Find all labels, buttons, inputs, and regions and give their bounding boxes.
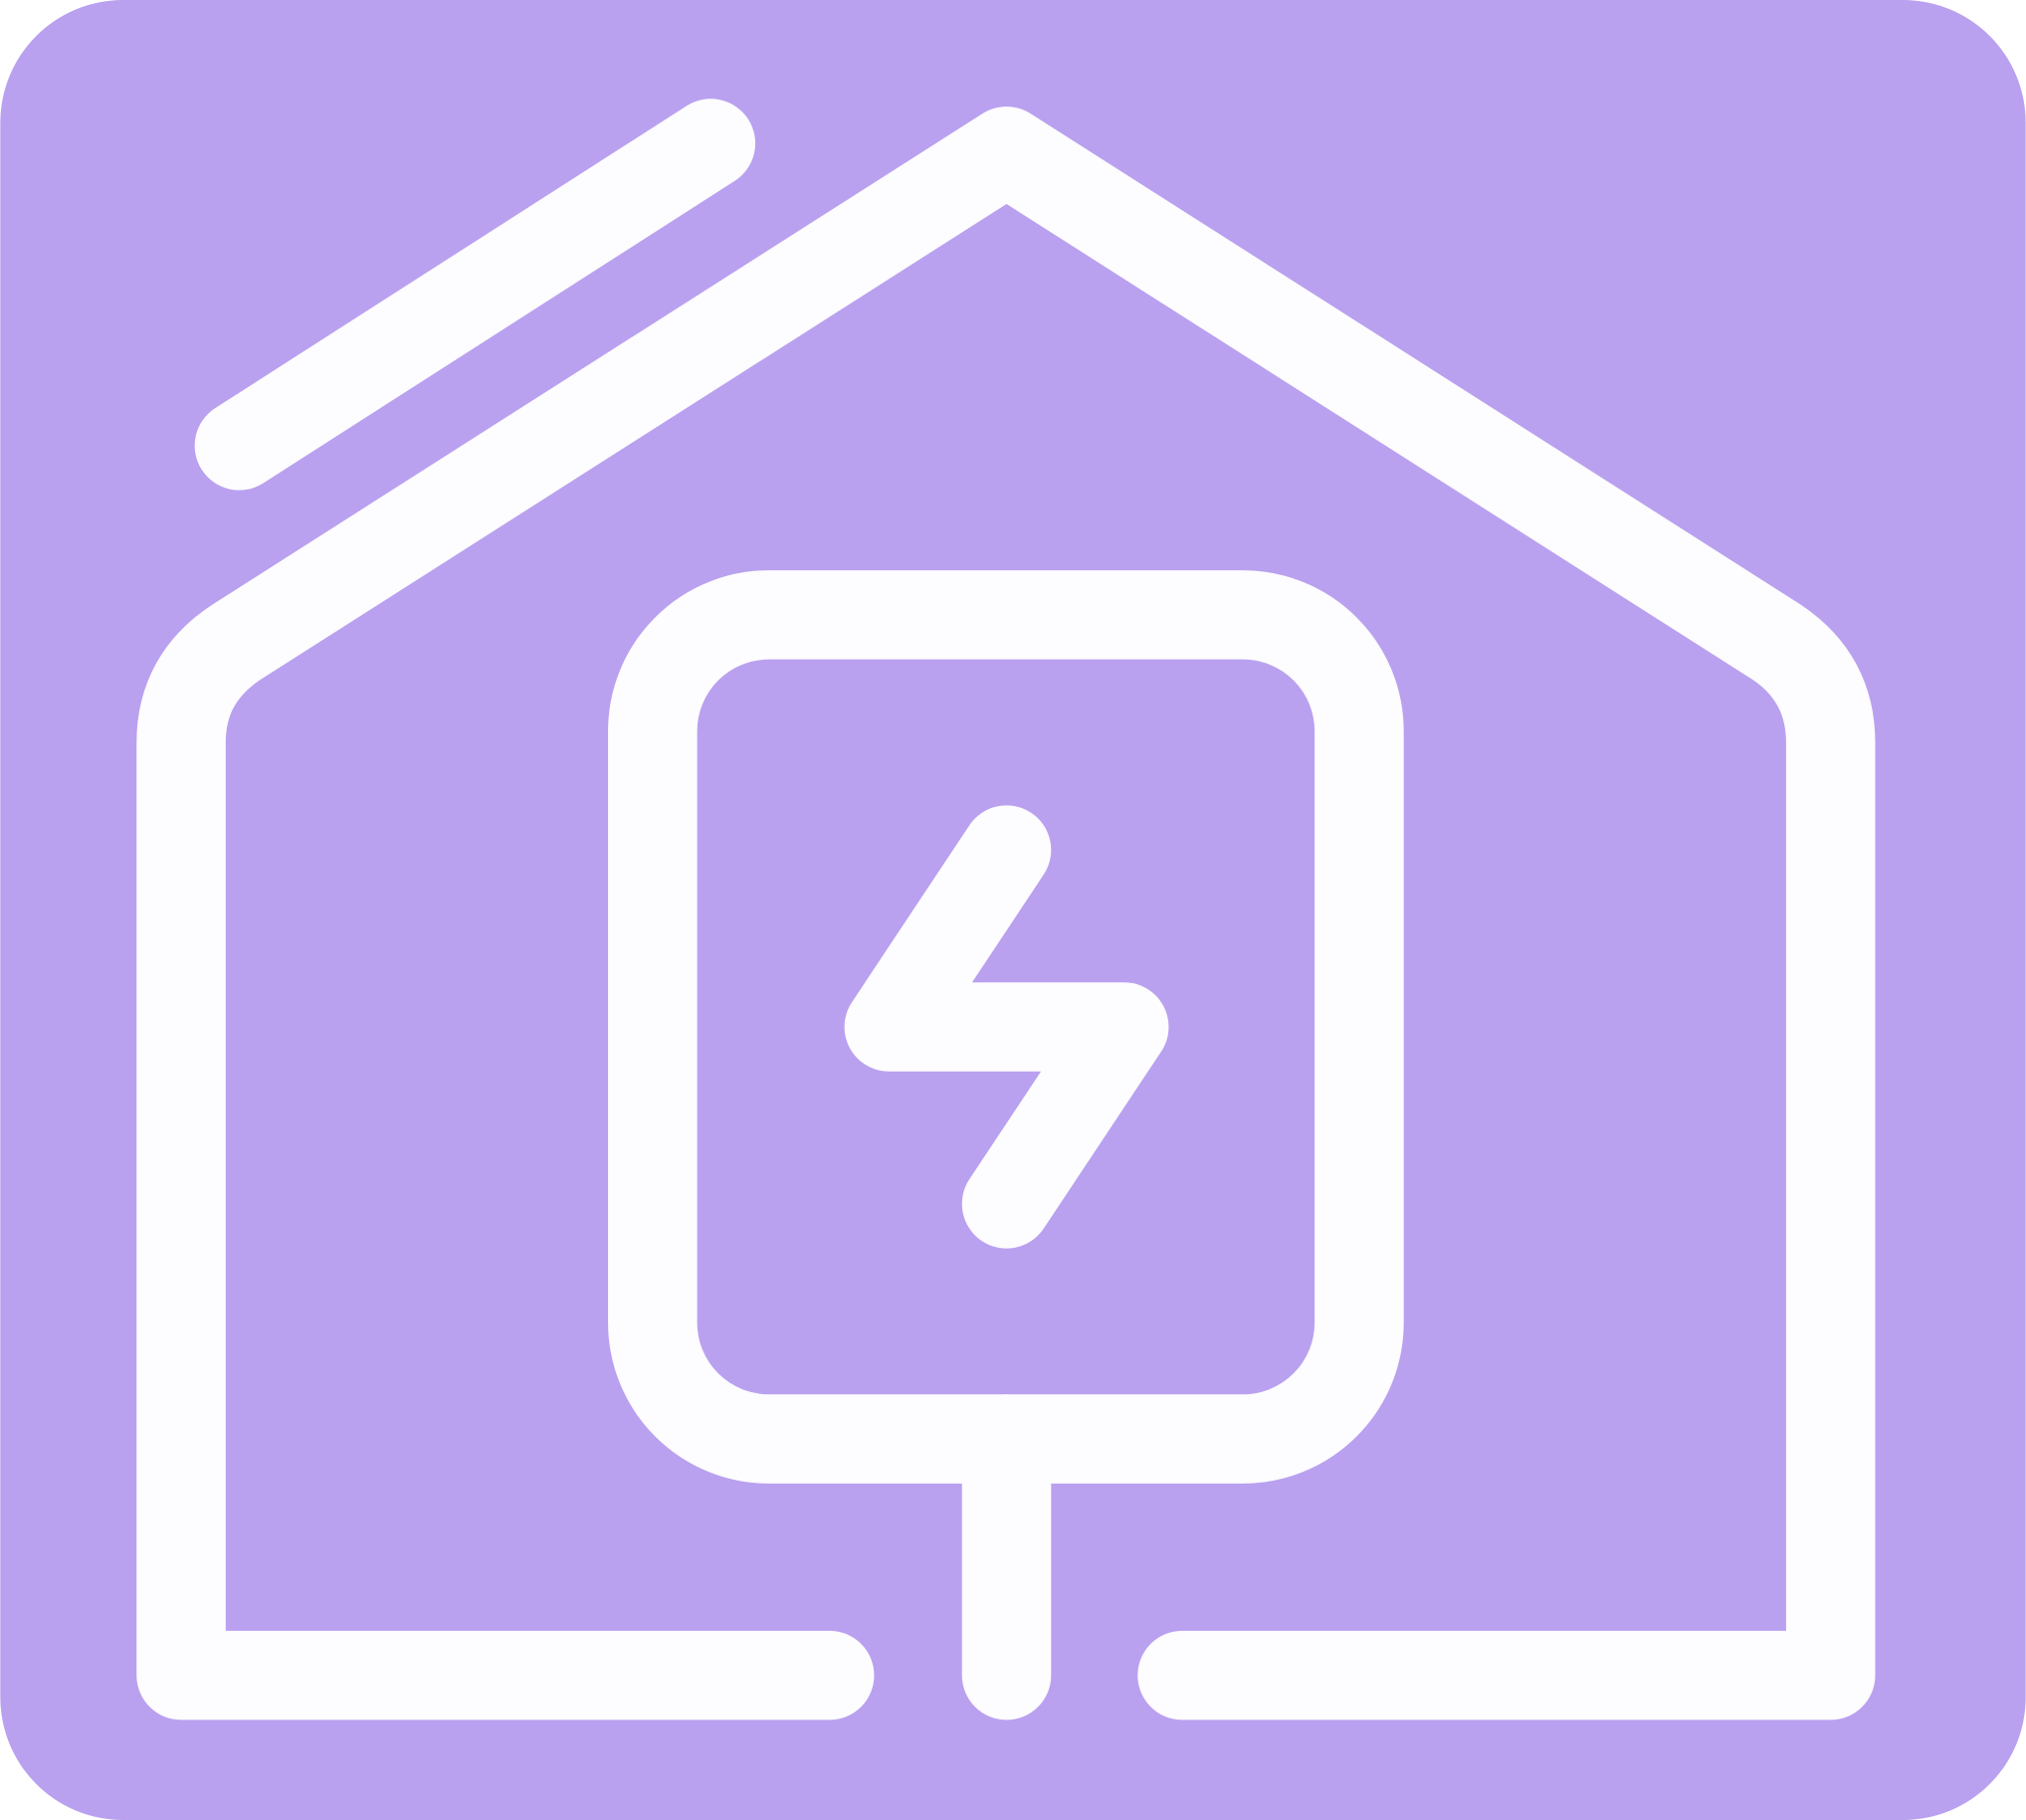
house outline <box>181 151 1831 1676</box>
diagonal roof line <box>239 143 710 446</box>
socket box <box>653 615 1359 1439</box>
lightning bolt <box>889 850 1124 1204</box>
cord <box>972 1439 1041 1676</box>
icon strokes <box>181 143 1831 1676</box>
